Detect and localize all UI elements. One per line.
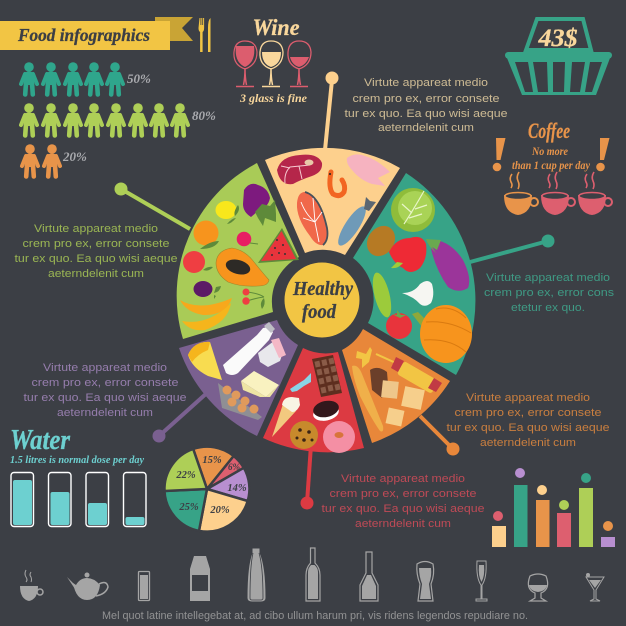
text block: fruit: tur ex quo. Ea quo wisi aeque [14, 253, 178, 265]
icon: brandy glass [528, 574, 548, 601]
icon: donut [323, 421, 355, 453]
connector: sweets [300, 445, 314, 510]
pie chart: 20% [209, 505, 230, 516]
text block: dairy: aeterndelenit cum [57, 407, 153, 419]
sector: grains [342, 329, 450, 443]
panel: wine [234, 15, 311, 105]
banner: Food infographics: Food infographics [17, 25, 150, 45]
icon: beer glass [417, 562, 434, 601]
text block: grains: Virtute appareat medio [466, 392, 590, 404]
icon: bread [370, 368, 399, 399]
sector: meat and fish [265, 148, 400, 255]
icon: eggplant [426, 239, 469, 291]
icon: sausage roll [376, 354, 442, 394]
text block: dairy: Virtute appareat medio [43, 362, 167, 374]
icon: chicken [347, 154, 390, 186]
pie chart: 14% [227, 483, 247, 494]
icon: tomato [386, 310, 412, 339]
drinks icon row [20, 548, 604, 601]
icon: orange [194, 220, 219, 249]
icon: basket 43$ [505, 19, 612, 95]
connector: grains [420, 416, 460, 456]
icon: grapes [243, 184, 270, 217]
panel: coffee: No more [531, 144, 569, 158]
center badge: Healthy food [284, 262, 360, 338]
icon: wine bottle [306, 548, 320, 601]
text block: fruit: crem pro ex, error consete [22, 238, 170, 250]
icon: coffee cup orange [504, 172, 538, 215]
pie chart [164, 447, 249, 532]
sector: fruit [177, 163, 299, 339]
icon: glass full [11, 472, 34, 526]
icon: lemon [216, 201, 239, 224]
icon: exclamation left [493, 138, 506, 171]
connector: dairy [152, 392, 208, 442]
icon: coffee cup red 1 [541, 172, 575, 215]
icon: apple [183, 251, 213, 273]
icon: garlic [402, 281, 433, 306]
icon: yogurt cup [258, 338, 286, 367]
icon: chocolate bar [312, 355, 342, 397]
text block: fruit [14, 223, 178, 280]
text block: vegetables: Virtute appareat medio [486, 272, 610, 284]
text block: grains: crem pro ex, error consete [454, 407, 602, 419]
panel: wine: 3 glass is fine [239, 93, 307, 105]
text block: top: Virtute appareat medio [364, 77, 488, 89]
icon: grape leaf [255, 200, 276, 226]
panel: wine: Wine [252, 15, 300, 40]
connector: fruit [114, 182, 190, 229]
icon: candy [290, 373, 311, 392]
icon: exclamation right [596, 138, 610, 171]
sector: sweets [263, 348, 364, 453]
icon: cracker small [386, 408, 404, 426]
icon: egg tray [218, 383, 262, 420]
text block: dairy: crem pro ex, error consete [32, 377, 178, 389]
panel: water: Water [10, 425, 71, 456]
sector: dairy [179, 320, 298, 436]
panel: coffee: Coffee [528, 118, 570, 143]
icon: cheese [188, 342, 222, 380]
icon: watermelon [258, 228, 299, 263]
icon: shrimp [329, 172, 345, 196]
icon: bananas [180, 298, 232, 330]
pie chart: 15% [202, 455, 222, 466]
icon: salmon steak [297, 192, 328, 245]
center badge: Healthy food: food [302, 301, 337, 323]
bar chart [492, 468, 615, 547]
text block: grains: tur ex quo. Ea quo wisi aeque [446, 422, 610, 434]
connector: meat [325, 72, 338, 150]
pie chart: 25% [178, 502, 199, 513]
icon: white wine glass half [260, 41, 283, 86]
pie chart: 22% [175, 470, 196, 481]
icon: cracker large [401, 386, 425, 410]
text block: top [344, 77, 508, 134]
icon: sandwich cookie [312, 398, 340, 423]
text block: vegetables [484, 272, 615, 314]
icon: butter [241, 371, 279, 397]
text block: vegetables: etetur ex quo. [511, 302, 585, 314]
icon: cabbage [391, 188, 435, 232]
text block: top: aeterndelenit cum [378, 122, 474, 134]
icon: champagne glass [476, 561, 487, 601]
icon: glass two thirds [48, 472, 71, 526]
row: 80% green people [21, 103, 216, 136]
text block: vegetables: crem pro ex, error cons [484, 287, 615, 299]
icon: farfalle [356, 347, 372, 368]
text block: fruit: aeterndelenit cum [48, 268, 144, 280]
icon: juice glass [138, 572, 150, 600]
text block: top: tur ex quo. Ea quo wisi aeque [344, 108, 508, 120]
icon: glass one third [86, 472, 108, 526]
icon: glass low [124, 472, 146, 526]
text block: sweets: tur ex quo. Ea quo wisi aeque [322, 503, 484, 515]
row: 80% green people: 80% [192, 108, 216, 123]
row: 20% orange people: 20% [62, 149, 87, 164]
icon: milk bottle [223, 322, 275, 375]
panel: water: 1.5 litres is normal dose per day [10, 455, 145, 466]
icon: papaya [216, 248, 269, 286]
panel: coffee [493, 118, 612, 215]
icon: chocolate chip cookie [290, 421, 318, 449]
icon: raspberry [237, 232, 258, 246]
connector: vegetables [470, 234, 554, 262]
icon: pumpkin [412, 305, 472, 363]
icon: potato [361, 220, 401, 262]
icon: plum [194, 281, 221, 299]
text block: dairy: tur ex quo. Ea quo wisi aeque [24, 392, 186, 404]
text block: sweets: crem pro ex, error consete [330, 488, 476, 500]
icon: coffee cup [20, 570, 43, 601]
icon: milk carton [190, 556, 210, 601]
panel: coffee: than 1 cup per day [512, 158, 591, 172]
row: 50% teal people: 50% [127, 71, 151, 86]
text block: sweets: Virtute appareat medio [341, 473, 465, 485]
food wheel [177, 148, 475, 453]
text block: grains: aeterndelenit cum [480, 437, 576, 449]
icon: fork and knife [198, 18, 210, 52]
icon: teapot [67, 572, 108, 600]
sector: vegetables [353, 173, 475, 375]
icon: martini glass [586, 573, 604, 601]
text block: sweets [322, 473, 484, 530]
text block: dairy [24, 362, 186, 419]
center badge: Healthy food: Healthy [292, 278, 353, 300]
panel: water [10, 425, 146, 526]
footer text: Mel quot latine intellegebat at, ad cibo ullum harum pri, vis ridens legendos repudiare no. [102, 610, 528, 622]
icon: red wine glass full [234, 41, 257, 86]
icon: bell pepper [389, 237, 426, 272]
pie chart: 6% [228, 462, 240, 472]
icon: coffee cup red 2 [578, 172, 612, 215]
text block: grains [446, 392, 610, 449]
row: 20% orange people [22, 144, 87, 176]
icon: red wine glass low [288, 41, 311, 86]
icon: cucumber [369, 271, 395, 319]
icon: basket 43$: 43$ [537, 25, 578, 52]
icon: bottle [248, 549, 265, 601]
people chart [21, 62, 216, 177]
icon: ice cream cone [272, 397, 300, 437]
row: 50% teal people [21, 62, 151, 94]
text block: top: crem pro ex, error consete [352, 93, 500, 105]
icon: baguette [352, 366, 383, 431]
icon: meat [277, 155, 322, 184]
icon: cherries [242, 288, 265, 309]
icon: liquor bottle [360, 552, 378, 601]
banner: Food infographics [0, 17, 193, 50]
icon: fish [334, 197, 376, 249]
text block: sweets: aeterndelenit cum [355, 518, 451, 530]
text block: fruit: Virtute appareat medio [34, 223, 158, 235]
